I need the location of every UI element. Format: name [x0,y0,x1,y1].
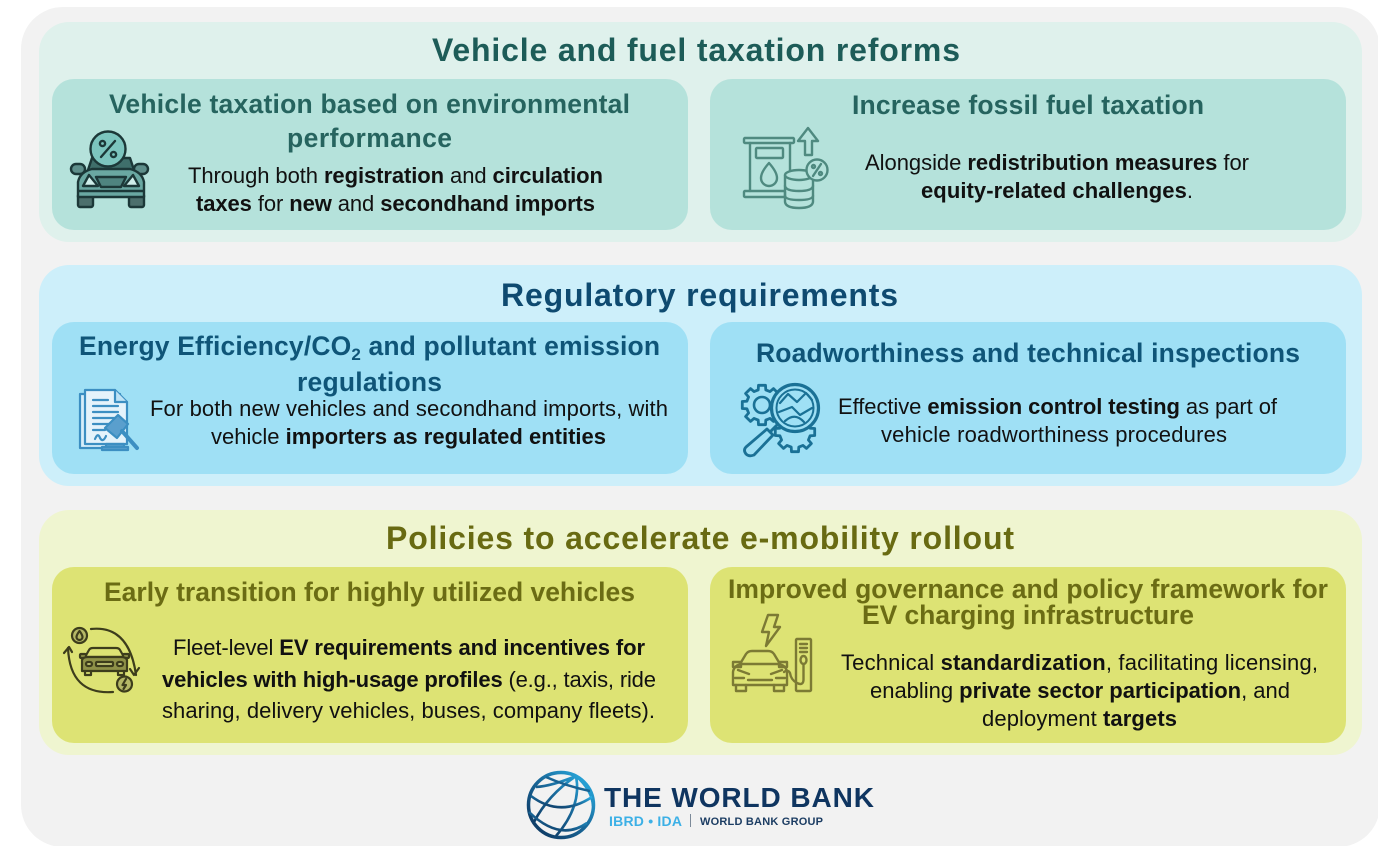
card heading: charging infrastructure: EV charging infrastructure [862,600,1194,630]
heading: vehicle and fuel taxation reforms: Vehicle and fuel taxation reforms [432,32,960,68]
card heading: emission regulations: regulations [297,367,442,397]
card body: early transition: vehicles with high-usage profiles (e.g., taxis, ride [162,667,656,692]
card body: emission regulations [150,396,668,449]
card: fossil fuel taxation [710,79,1346,230]
card: roadworthiness [710,322,1346,474]
card body: roadworthiness [838,394,1278,447]
card heading: emission regulations [79,331,660,397]
card body: roadworthiness: Effective emission control testing as part of [838,394,1278,419]
card heading: emission regulations: and pollutant emission [361,331,660,361]
card body: fossil fuel taxation: Alongside redistribution measures for [865,150,1249,175]
icon: document with gavel [80,390,137,450]
card heading: roadworthiness: Roadworthiness and technical inspections [756,338,1300,368]
card heading: fossil fuel taxation: Increase fossil fuel taxation [852,90,1204,120]
icon: electric car at charging station [733,615,811,691]
card heading: vehicle taxation: performance [287,123,452,153]
card body: vehicle taxation: Through both registration and circulation [188,163,603,188]
card heading: vehicle taxation [109,89,630,153]
card: emission regulations [52,322,688,474]
logo subline [609,813,823,829]
card body: charging infrastructure: deployment targets [982,706,1177,731]
card body: fossil fuel taxation [865,150,1249,203]
icon: globe [528,772,594,838]
card heading: charging infrastructure [728,574,1328,630]
card body: early transition: Fleet-level EV requirements and incentives for [173,635,645,660]
icon: fuel barrel with arrow and percent [744,128,828,208]
card body: charging infrastructure: Technical standardization, facilitating licensing, [841,650,1318,675]
logo subline: WORLD BANK GROUP [700,816,823,828]
logo wordmark: THE WORLD BANK [604,782,874,813]
card heading: emission regulations: 2 [351,345,361,364]
card: vehicle taxation [52,79,688,230]
icon: car in fuel to electric cycle [64,628,139,692]
logo: the world bank [528,772,874,838]
panel: regulatory requirements [39,265,1362,486]
card heading: emission regulations: Energy Efficiency/CO [79,331,351,361]
panel: policies to accelerate e-mobility rollout [39,510,1362,755]
card heading: vehicle taxation: Vehicle taxation based on environmental [109,89,630,119]
card body: charging infrastructure: enabling private sector participation, and [870,678,1290,703]
card body: early transition: sharing, delivery vehicles, buses, company fleets). [162,698,655,723]
card: charging infrastructure [710,567,1346,743]
card body: charging infrastructure [841,650,1318,731]
card body: emission regulations: vehicle importers as regulated entities [211,424,606,449]
card body: vehicle taxation: taxes for new and secondhand imports [196,191,595,216]
card body: vehicle taxation [188,163,603,216]
card: early transition [52,567,688,743]
card heading: charging infrastructure: Improved governance and policy framework for [728,574,1328,604]
panel: vehicle and fuel taxation reforms [39,22,1362,242]
card heading: early transition: Early transition for highly utilized vehicles [104,577,635,607]
logo subline: IBRD • IDA [609,813,682,829]
card body: early transition [162,635,656,723]
card body: roadworthiness: vehicle roadworthiness procedures [881,422,1227,447]
card body: emission regulations: For both new vehicles and secondhand imports, with [150,396,668,421]
heading: regulatory requirements: Regulatory requirements [501,277,898,313]
card body: fossil fuel taxation: equity-related challenges. [921,178,1193,203]
icon: gears under magnifying glass [742,384,818,456]
icon: car with percent badge [71,132,148,207]
heading: policies to accelerate e-mobility rollout: Policies to accelerate e-mobility rollout [386,520,1014,556]
